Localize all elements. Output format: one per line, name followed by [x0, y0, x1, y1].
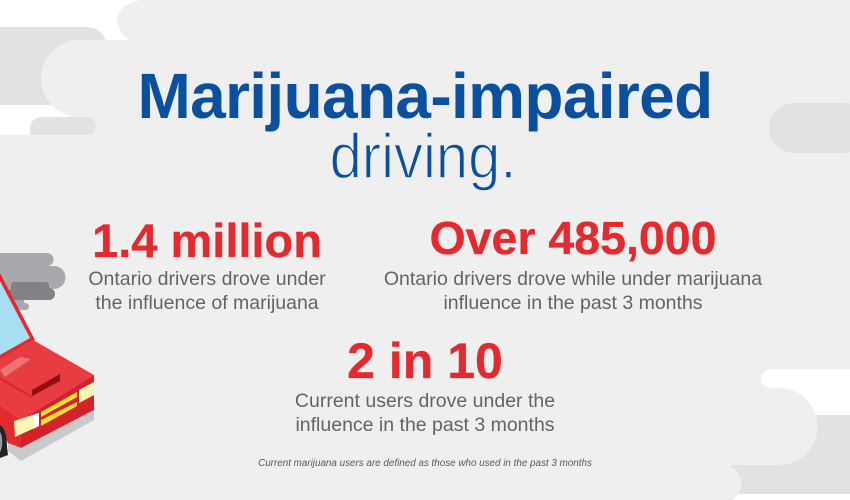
subtitle: driving: driving.	[330, 122, 516, 192]
stat description: Ontario drivers drove while under marijuana	[384, 268, 762, 290]
stat description: influence in the past 3 months	[443, 292, 703, 314]
stat description: influence in the past 3 months	[295, 414, 555, 436]
stat number: 1.4 million	[92, 214, 322, 267]
illustration: red car with exhaust smoke	[0, 253, 94, 461]
footnote: Current marijuana users are defined as those who used in the past 3 months	[258, 458, 592, 469]
stat description: the influence of marijuana	[95, 292, 319, 314]
car	[0, 273, 94, 461]
stat description	[384, 268, 762, 314]
stat number: 2 in 10	[347, 333, 503, 389]
title: Marijuana-impaired	[137, 60, 713, 132]
exhaust smoke	[0, 253, 66, 310]
stat: 2 in 10	[295, 333, 555, 436]
stat number: Over 485,000	[430, 212, 716, 264]
stat: 1.4 million	[88, 214, 326, 314]
stat description: Ontario drivers drove under	[88, 268, 326, 290]
stat description	[295, 390, 555, 436]
stat description	[88, 268, 326, 314]
stat: over 485,000	[384, 212, 762, 314]
stat description: Current users drove under the	[295, 390, 555, 412]
